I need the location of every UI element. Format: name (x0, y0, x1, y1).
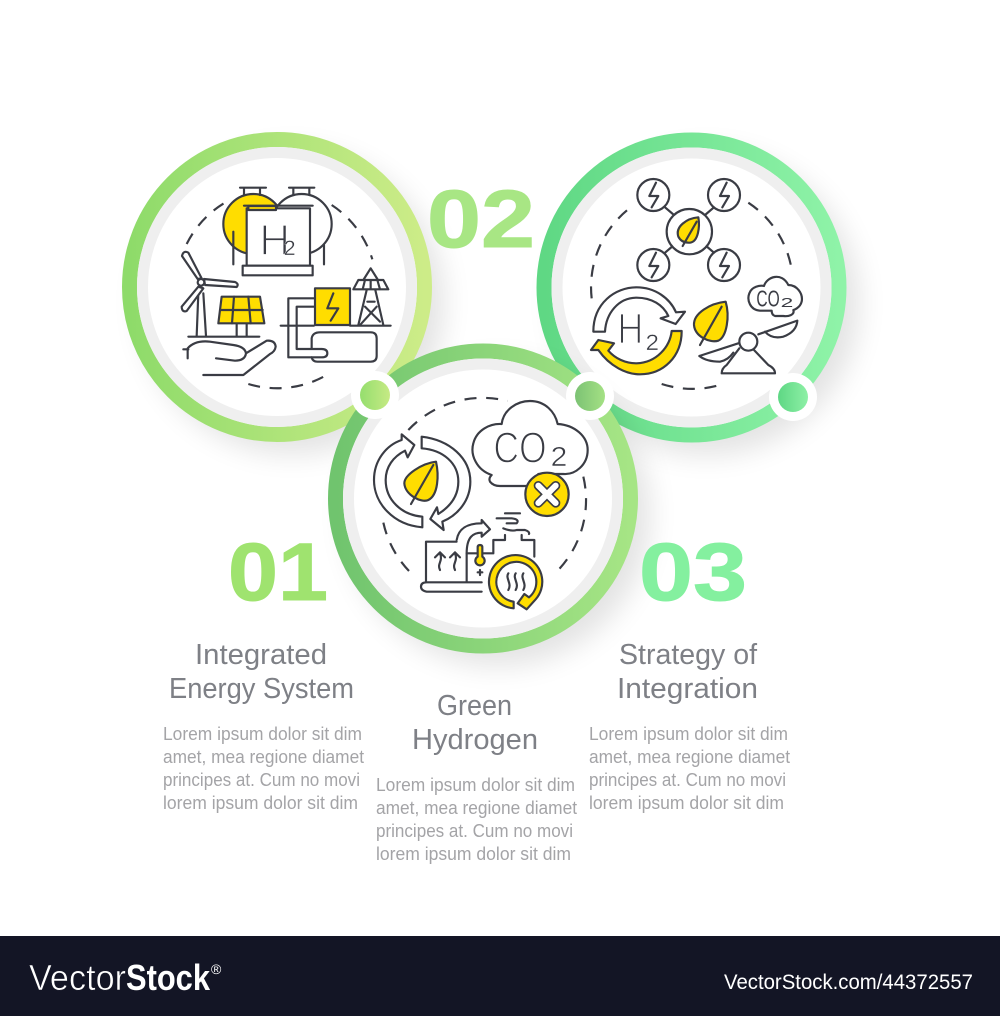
text block: integrated energy system: amet, mea regione diamet (163, 747, 364, 767)
icon: green grid, hydrogen cycle and CO2 balance: 2 (646, 330, 659, 355)
heading: strategy of integration (617, 639, 758, 705)
text block: green hydrogen: Lorem ipsum dolor sit dim (376, 775, 575, 795)
text block: integrated energy system: principes at. Cum no movi (163, 770, 360, 790)
heading: green hydrogen: Green (437, 690, 512, 722)
text block: strategy of integration (589, 724, 790, 813)
text block: green hydrogen: principes at. Cum no movi (376, 821, 573, 841)
number 01: 01 (228, 527, 328, 618)
heading: integrated energy system: Energy System (169, 673, 354, 705)
icon: hydrogen storage, renewables and grid: 2 (284, 236, 296, 260)
panel: strategy of integration circle (544, 140, 859, 455)
connector dot: circle 2 (769, 373, 817, 421)
logo: VectorStock: ® (211, 961, 222, 977)
icon: hydrogen storage, renewables and grid (182, 188, 391, 388)
footer bar: VectorStock watermark (0, 936, 1000, 1016)
heading: strategy of integration: Integration (617, 673, 758, 705)
icon: hydrogen storage, renewables and grid: H (259, 216, 290, 265)
panel: green hydrogen circle (336, 351, 650, 666)
icon: green grid, hydrogen cycle and CO2 balance: CO (756, 286, 780, 312)
icon: green grid, hydrogen cycle and CO2 balance: H (617, 305, 643, 353)
heading: green hydrogen (412, 690, 538, 756)
logo: VectorStock (29, 957, 222, 998)
text block: strategy of integration: amet, mea regione diamet (589, 747, 790, 767)
text block: strategy of integration: principes at. Cum no movi (589, 770, 786, 790)
number 02: 02 (427, 174, 535, 265)
panel: integrated energy system circle (130, 140, 444, 454)
number 03: 03 (639, 527, 747, 618)
heading: green hydrogen: Hydrogen (412, 724, 538, 756)
icon: green grid, hydrogen cycle and CO2 balance (591, 179, 802, 389)
text block: green hydrogen: lorem ipsum dolor sit dim (376, 844, 571, 864)
text block: integrated energy system: Lorem ipsum dolor sit dim (163, 724, 362, 744)
text block: strategy of integration: Lorem ipsum dolor sit dim (589, 724, 788, 744)
heading: strategy of integration: Strategy of (619, 639, 757, 671)
icon: green grid, hydrogen cycle and CO2 balance: 2 (781, 296, 793, 310)
image id text: VectorStock.com/44372557 (724, 971, 973, 994)
text block: green hydrogen (376, 775, 577, 864)
text block: strategy of integration: lorem ipsum dolor sit dim (589, 793, 784, 813)
logo: VectorStock: Stock (126, 957, 211, 998)
heading: integrated energy system (169, 639, 354, 705)
text block: green hydrogen: amet, mea regione diamet (376, 798, 577, 818)
heading: integrated energy system: Integrated (195, 639, 327, 671)
logo: VectorStock: Vector (29, 957, 126, 998)
icon: recycling leaf, CO2 cloud and factory heat (374, 398, 588, 609)
connector dot: circle 1 (351, 371, 399, 419)
text block: integrated energy system: lorem ipsum dolor sit dim (163, 793, 358, 813)
connector dot: circle 3 (566, 372, 614, 420)
icon: recycling leaf, CO2 cloud and factory heat: 2 (551, 441, 567, 472)
text block: integrated energy system (163, 724, 364, 813)
icon: recycling leaf, CO2 cloud and factory heat: CO (493, 425, 547, 473)
